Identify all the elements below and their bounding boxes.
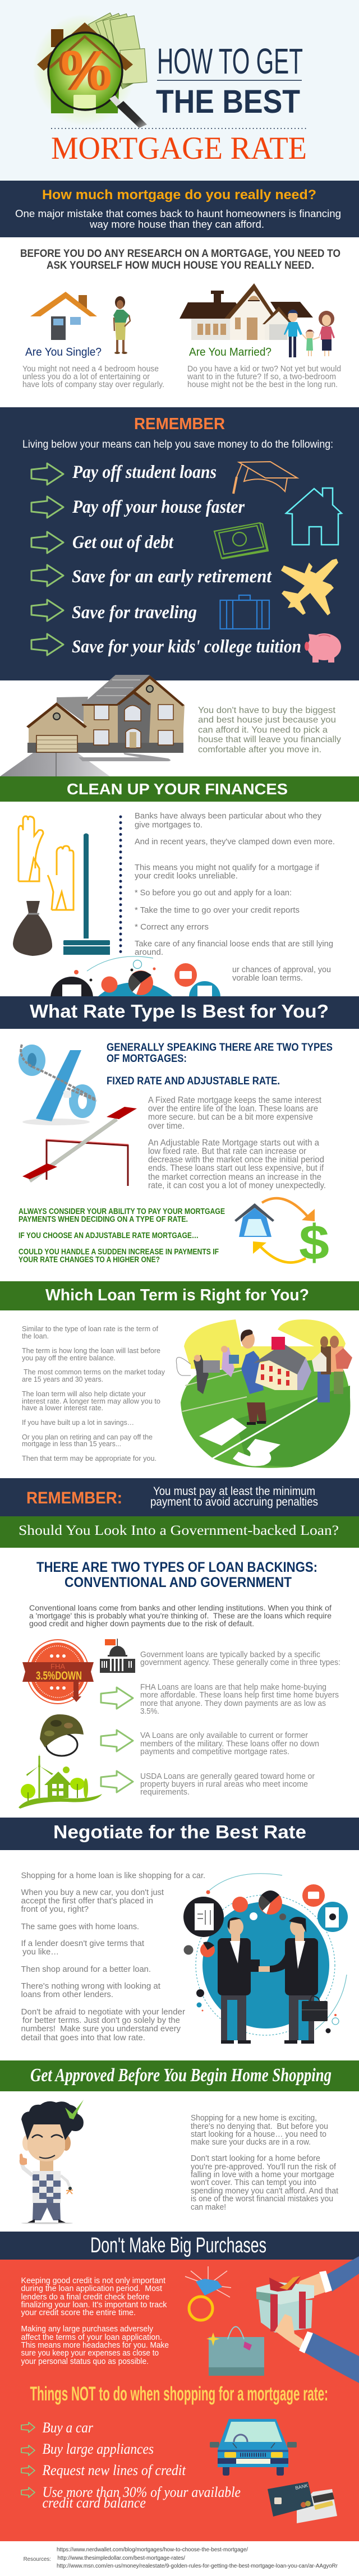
icon: large suburban house xyxy=(26,675,185,753)
text block: low fixed rate. But that rate can increase or xyxy=(148,1147,306,1156)
text block: decrease with the market once the initial period xyxy=(148,1155,324,1165)
callout: consider your ability to pay: PAYMENTS WHEN DECIDING ON A TYPE OF RATE. xyxy=(19,1215,188,1224)
text block: Conventional loans come from banks and other lending institutions. When you think of xyxy=(29,1603,332,1612)
list of savings goals: Save for an early retirement xyxy=(72,567,272,587)
icon: military helmet xyxy=(40,1714,84,1756)
text: FHA loans: more affordable. These loans help first time home buyers xyxy=(140,1691,339,1700)
callout: consider your ability to pay: IF YOU CHOOSE AN ADJUSTABLE RATE MORTGAGE… xyxy=(19,1231,199,1240)
text block: comfortable after you move in. xyxy=(198,745,321,755)
text block: Similar to the type of loan rate is the term of xyxy=(22,1324,158,1333)
icon: shopping bag xyxy=(206,2327,264,2376)
callout: consider your ability to pay xyxy=(19,1207,225,1264)
heading: two types of mortgages: GENERALLY SPEAKING THERE ARE TWO TYPES xyxy=(107,1042,333,1054)
panel: clean up content xyxy=(0,802,359,1094)
callout: consider your ability to pay: YOUR RATE CHANGES TO A HIGHER ONE? xyxy=(19,1255,160,1264)
text block: Then that term may be appropriate for you. xyxy=(22,1454,157,1462)
heading: THERE ARE TWO TYPES OF LOAN BACKINGS: xyxy=(36,1560,317,1575)
panel: remember minimum payment xyxy=(0,1478,359,1516)
heading: REMEMBER: xyxy=(26,1489,122,1507)
arrow: VA xyxy=(101,1730,133,1751)
text block: * Take the time to go over your credit reports xyxy=(135,905,300,915)
text block: source links xyxy=(57,2547,338,2569)
text block: There's nothing wrong with looking at xyxy=(21,1981,161,1991)
icon: credit cards xyxy=(268,2482,337,2523)
text block: mortgage in less than 15 years... xyxy=(22,1439,121,1448)
icon: gloves xyxy=(19,816,73,910)
text block: source links: https://www.nerdwallet.com/blog/mortgages/how-to-choose-the-best-mortgage/ xyxy=(57,2547,248,2553)
text block: house that will leave you financially xyxy=(198,735,341,744)
text block: sure you keep your expenses as close to xyxy=(21,2349,159,2358)
arrow: USDA xyxy=(101,1771,133,1792)
text: FHA loans: FHA Loans are loans are that help make home-buying xyxy=(140,1683,326,1692)
heading: two types of mortgages xyxy=(107,1042,333,1087)
text block: ends. These loans start out less expensive, but if xyxy=(148,1163,324,1173)
heading: two types of mortgages: OF MORTGAGES: xyxy=(107,1053,187,1065)
text: government loans intro: government agency. These generally come in three types: xyxy=(140,1658,340,1667)
callout: consider your ability to pay: COULD YOU HANDLE A SUDDEN INCREASE IN PAYMENTS IF xyxy=(19,1248,219,1257)
icon: house with magnifier and cash xyxy=(33,13,147,128)
text: single xyxy=(22,364,164,389)
text: USDA loans xyxy=(140,1772,315,1797)
icon: hands holding a gift xyxy=(256,2256,359,2383)
text block: won't cover. This can tempt you into xyxy=(190,2178,316,2187)
heading: Don't Make Big Purchases xyxy=(90,2234,266,2257)
text: FHA loans: 3.5%. xyxy=(140,1707,159,1716)
text block: You don't have to buy the biggest xyxy=(198,706,336,715)
text block: there's no denying that. But before you xyxy=(191,2122,328,2131)
text block: for better terms. Just don't go solely by the xyxy=(22,2016,180,2025)
icon: house and dollar cycle xyxy=(234,1198,329,1270)
dotted divider column xyxy=(119,817,122,952)
text block: the loan. xyxy=(22,1332,49,1340)
text block: You must pay at least the minimum xyxy=(153,1485,315,1498)
panel: resources xyxy=(0,2541,359,2576)
icon: house with magnifier and cash: % xyxy=(58,39,109,102)
text block: start looking for a house… you need to xyxy=(191,2130,326,2139)
text: VA loans xyxy=(140,1731,319,1756)
icon: seesaw xyxy=(22,1107,137,1186)
text block: payment to avoid accruing penalties xyxy=(150,1496,318,1508)
heading: ASK YOURSELF HOW MUCH HOUSE YOU REALLY NEED. xyxy=(47,259,314,272)
text block xyxy=(21,1871,205,2043)
title: MORTGAGE RATE xyxy=(51,131,307,166)
label: resources: Resources: xyxy=(24,2556,51,2563)
text block: give mortgages to. xyxy=(135,820,202,830)
text: USDA loans: USDA Loans are generally geared toward home or xyxy=(140,1772,315,1781)
text: married xyxy=(187,364,341,389)
text block: vorable loan terms. xyxy=(232,973,303,983)
icon: family house xyxy=(180,283,313,340)
icon: airplane xyxy=(281,559,338,615)
text block: lenders do a final credit check before xyxy=(21,2293,149,2302)
text block: more secure. but can be a bit more expensive xyxy=(148,1112,313,1122)
text block xyxy=(198,706,341,755)
text block: The loan term will also help dictate your xyxy=(22,1390,146,1398)
text block: you pay off the entire balance. xyxy=(22,1354,116,1362)
text block: Living below your means can help you save money to do the following: xyxy=(22,439,333,450)
list of things not to do: Use more than 30% of your available xyxy=(43,2484,241,2500)
list of things not to do: Request new lines of credit xyxy=(42,2462,186,2478)
caption: married: Are You Married? xyxy=(189,346,271,358)
text: single: unless you do a lot of entertaining or xyxy=(22,372,150,381)
icon: FHA 3.5% down badge: FHA xyxy=(50,1662,65,1671)
text block: This means you might not qualify for a mortgage if xyxy=(135,863,320,872)
text block: make sure your ducks are in a row. xyxy=(191,2138,311,2147)
list of savings goals: Get out of debt xyxy=(72,532,174,553)
text block: over time. xyxy=(148,1121,185,1131)
text block: numbers! Make sure you understand every xyxy=(21,2024,181,2034)
panel: get approved content xyxy=(0,2091,359,2232)
text block: Shopping for a new home is exciting, xyxy=(191,2114,317,2123)
text block xyxy=(190,2114,338,2212)
icon: small house xyxy=(30,292,97,340)
text block: good credit and higher down payments due to the risk of default. xyxy=(29,1619,254,1628)
text block: One major mistake that comes back to haunt homeowners is financing xyxy=(15,208,341,219)
list of savings goals: Pay off your house faster xyxy=(72,497,245,517)
text block: This means more headaches for you. Make xyxy=(21,2341,169,2350)
text block: An Adjustable Rate Mortgage starts out with a xyxy=(148,1138,319,1148)
text block: and best house just because you xyxy=(198,715,336,725)
text: FHA loans xyxy=(140,1683,339,1716)
text block: The most common terms on the market today xyxy=(24,1368,165,1376)
text block: source links: http://www.msn.com/en-us/money/realestate/9-golden-rules-for-getting-the-best-mortgage-loan-you-can/ar-AAgyoRr xyxy=(57,2563,338,2569)
icon: capitol building xyxy=(100,1639,135,1673)
icon: rural green house and windmill xyxy=(19,1754,102,1809)
text: single: You might not need a 4 bedroom house xyxy=(22,364,159,374)
text block xyxy=(22,1324,165,1462)
text block: detail that goes into that low rate. xyxy=(21,2033,145,2043)
list of savings goals: Save for your kids' college tuition xyxy=(72,637,301,657)
text block: you're pre-approved. You'll run the risk of xyxy=(191,2163,337,2172)
text block: over the entire life of the loan. These loans are xyxy=(148,1104,318,1114)
icon: house outline xyxy=(286,488,342,545)
icon: woman xyxy=(113,296,130,354)
panel: remember list xyxy=(0,407,359,680)
text block: Making any large purchases adversely xyxy=(21,2325,154,2334)
text block: Take care of any financial loose ends that are still lying xyxy=(135,939,333,949)
text block: Or you plan on retiring and can pay off the xyxy=(22,1433,153,1441)
icon: diamond ring xyxy=(185,2266,231,2320)
text: USDA loans: requirements. xyxy=(140,1788,190,1797)
heading: CLEAN UP YOUR FINANCES xyxy=(67,780,288,798)
callout: consider your ability to pay: ALWAYS CONSIDER YOUR ABILITY TO PAY YOUR MORTGAGE xyxy=(19,1207,225,1216)
heading: Negotiate for the Best Rate xyxy=(53,1821,306,1842)
panel: government loans content xyxy=(0,1548,359,1818)
text block: Don't be afraid to negotiate with your lender xyxy=(21,2007,185,2017)
icon: piggy bank xyxy=(305,633,341,663)
text block: And in recent years, they've clamped down even more. xyxy=(135,837,335,847)
arrow: list markers xyxy=(21,2422,35,2497)
text block: falling in love with a home your mortgage xyxy=(191,2170,334,2179)
text block: around. xyxy=(135,947,163,957)
text block: accept the first offer that's placed in xyxy=(21,1896,153,1906)
list of savings goals xyxy=(72,462,301,657)
heading: REMEMBER xyxy=(134,415,225,433)
text block: When you buy a new car, you don't just xyxy=(21,1888,164,1897)
text block: The term is how long the loan will last before xyxy=(22,1346,160,1355)
text block xyxy=(15,208,341,230)
icon: credit cards: BANK xyxy=(294,2482,309,2491)
text: married: want to in the future? If so, a two-bedroom xyxy=(187,372,336,381)
text block: Don't start looking for a home before xyxy=(191,2154,320,2163)
panel: header xyxy=(0,0,359,181)
text block: If a lender doesn't give terms that xyxy=(21,1939,145,1948)
text block: Shopping for a home loan is like shopping for a car. xyxy=(21,1871,205,1880)
text block: rate, it can cost you a lot of money unexpectedly. xyxy=(148,1181,326,1190)
panel: rate type heading xyxy=(0,996,359,1029)
text: married: Do you have a kid or two? Not yet but would xyxy=(187,364,341,374)
text block: Then shop around for a better loan. xyxy=(21,1965,151,1974)
heading xyxy=(20,247,340,272)
list of things not to do xyxy=(42,2419,241,2511)
icon: house and dollar cycle: $ xyxy=(299,1215,329,1270)
text block: have a lower interest rate. xyxy=(22,1404,103,1412)
text: married: house might not be the best in the long run. xyxy=(187,380,338,389)
text block: your credit score the entire time. xyxy=(21,2308,136,2317)
illustration: cropped business graphic xyxy=(50,955,232,1094)
text block: affect the terms of your loan application. xyxy=(21,2333,162,2342)
icon: car xyxy=(210,2419,297,2476)
panel: negotiate content xyxy=(0,1850,359,2060)
driveway xyxy=(0,753,171,776)
text block: loans from other lenders. xyxy=(21,1990,113,1999)
icon: briefcase xyxy=(220,595,269,629)
text block: * So before you go out and apply for a loan: xyxy=(135,888,292,898)
text block: finalizing your loan. It's important to track xyxy=(21,2301,167,2310)
text: FHA loans: more that anyone. They down payments are as low as xyxy=(140,1699,326,1708)
icon: FHA 3.5% down badge xyxy=(22,1640,94,1704)
icon: FHA 3.5% down badge: 3.5%DOWN xyxy=(36,1669,82,1682)
heading: What Rate Type Is Best for You? xyxy=(30,1001,329,1022)
text block: way more house than they can afford. xyxy=(89,218,264,230)
text block: source links: http://www.thesimpledollar.com/best-mortgage-rates/ xyxy=(57,2555,185,2561)
heading: Should You Look Into a Government-backed Loan? xyxy=(19,1523,339,1538)
text block: can make! xyxy=(191,2203,226,2212)
text block: during the loan application period. Most xyxy=(21,2284,162,2293)
text block: you like… xyxy=(22,1947,59,1957)
list of savings goals: Save for traveling xyxy=(72,602,197,623)
text block: a 'mortgage' this is probably what you're thinking of. These are the loans which require xyxy=(29,1611,332,1620)
text: USDA loans: property buyers in rural areas who meet income xyxy=(140,1780,308,1789)
text: VA loans: VA Loans are only available to current or former xyxy=(140,1731,308,1740)
text block xyxy=(135,811,335,983)
illustration: people carrying houses on a 15-year line xyxy=(176,1319,352,1468)
icon: family xyxy=(284,310,335,357)
icon: graduation cap xyxy=(233,462,297,494)
icon: mop xyxy=(63,834,110,955)
text block: A Fixed Rate mortgage keeps the same interest xyxy=(148,1096,322,1105)
panel: rate type content xyxy=(0,1029,359,1281)
arrow: list markers xyxy=(31,463,63,655)
text block xyxy=(148,1096,326,1190)
panel: biggest house advice xyxy=(0,675,359,776)
text: VA loans: members of the military. These loans offer no down xyxy=(140,1740,319,1749)
text: government loans intro xyxy=(140,1650,340,1667)
list of things not to do: Buy a car xyxy=(43,2419,94,2436)
text block: your personal status quo as possible. xyxy=(21,2357,149,2366)
panel: negotiate heading xyxy=(0,1818,359,1850)
text block: spending money you can't afford. And that xyxy=(191,2187,338,2196)
panel: loan term heading xyxy=(0,1281,359,1310)
panel: government-backed heading xyxy=(0,1516,359,1548)
panel: single or married xyxy=(0,237,359,407)
list of things not to do: Buy large appliances xyxy=(43,2441,154,2457)
text block xyxy=(21,2276,169,2366)
text: government loans intro: Government loans are typically backed by a specific xyxy=(140,1650,320,1659)
list of savings goals: Pay off student loans xyxy=(72,462,217,482)
text block xyxy=(29,1603,332,1628)
icon: cash xyxy=(214,523,268,559)
text block: your credit looks unreliable. xyxy=(135,871,238,881)
text block: front of you, right? xyxy=(21,1905,89,1914)
text: single: have lots of company stay over regularly. xyxy=(22,380,164,389)
title xyxy=(51,41,307,166)
text block: the market correction means an increase in the xyxy=(148,1172,321,1182)
text block: are 15 years and 30 years. xyxy=(22,1375,103,1383)
heading xyxy=(36,1560,317,1590)
illustration: man with keys and thumbs up xyxy=(20,2100,84,2224)
list of things not to do: credit card balance xyxy=(43,2495,146,2511)
illustration: two businessmen shaking hands xyxy=(183,1874,348,2044)
text block: If you have built up a lot in savings… xyxy=(22,1418,134,1427)
text block: * Correct any errors xyxy=(135,922,209,932)
heading: CONVENTIONAL AND GOVERNMENT xyxy=(65,1575,292,1590)
arrow: FHA xyxy=(101,1687,133,1709)
heading: Which Loan Term is Right for You? xyxy=(45,1286,309,1304)
text block: The same goes with home loans. xyxy=(21,1922,139,1931)
text block: interest rate. A longer term may allow you to xyxy=(22,1397,160,1405)
text block: Keeping good credit is not only important xyxy=(21,2276,165,2285)
caption: single: Are You Single? xyxy=(25,346,102,358)
icon: house with magnifier and cash: % xyxy=(61,39,112,102)
panel: big purchases content xyxy=(0,2256,359,2541)
panel: how much mortgage xyxy=(0,181,359,237)
icon: garbage bag xyxy=(13,901,52,956)
panel: big purchases heading xyxy=(0,2232,359,2260)
heading: two types of mortgages: FIXED RATE AND ADJUSTABLE RATE. xyxy=(107,1075,280,1087)
heading: How much mortgage do you really need? xyxy=(42,187,316,203)
text block: is one of the worst financial mistakes you xyxy=(191,2195,333,2204)
panel: get approved heading xyxy=(0,2060,359,2091)
text block: ur chances of approval, you xyxy=(232,965,331,974)
text block: Banks have always been particular about who they xyxy=(135,811,321,821)
text block: can afford it. You need to pick a xyxy=(198,725,328,735)
text: VA loans: payments and competitive mortgage rates. xyxy=(140,1747,289,1756)
panel: clean up heading xyxy=(0,776,359,802)
panel: loan term content xyxy=(0,1310,359,1478)
icon: chained percent sign xyxy=(19,1045,96,1125)
text block xyxy=(150,1485,318,1508)
title: THE BEST xyxy=(156,84,300,120)
